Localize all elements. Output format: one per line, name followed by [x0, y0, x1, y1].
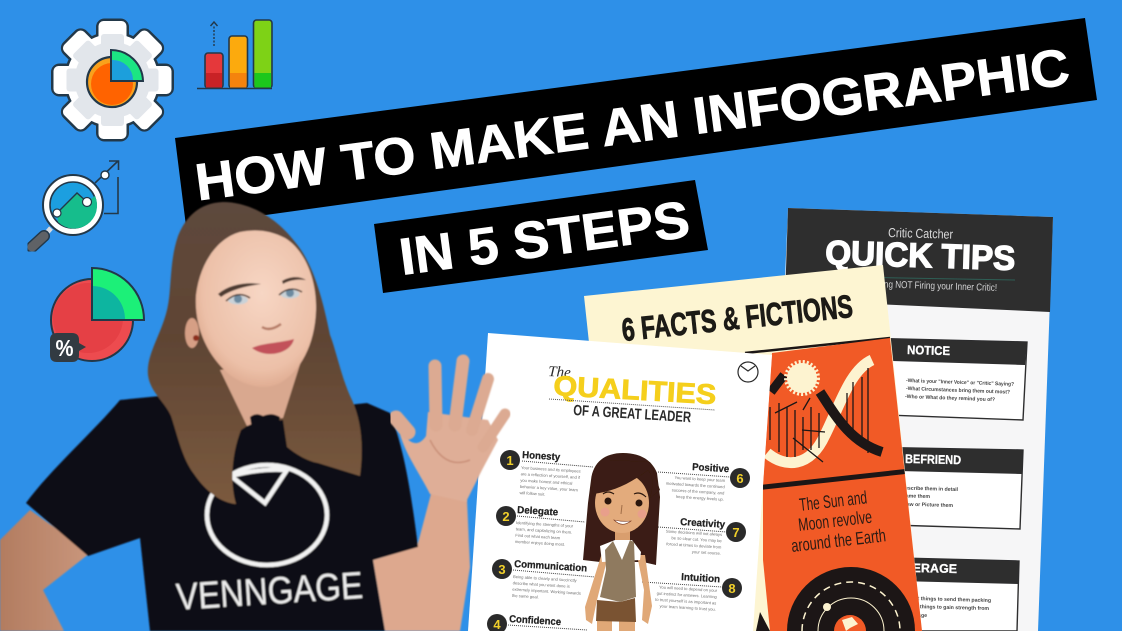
panel: quick tips poster [770, 208, 1053, 631]
section: notice [860, 338, 1027, 420]
quality headings: Honesty [522, 450, 561, 463]
poster title: QUALITIES [553, 370, 717, 410]
icon: percent pie chart [50, 268, 144, 362]
icon: magnifier over line chart [32, 161, 118, 247]
quality descriptions: you make honest and ethical [520, 478, 573, 486]
badge numbers: 7 [732, 525, 740, 540]
quality headings: Communication [514, 559, 587, 574]
fact text: The Sun and [798, 487, 868, 515]
quality descriptions: Some decisions will not always [666, 529, 722, 537]
quality headings: Creativity [680, 517, 726, 531]
icon: percent pie chart: % [56, 335, 74, 361]
quality descriptions: member enjoys doing most. [515, 539, 565, 547]
mouth [252, 339, 294, 354]
badge numbers: 3 [498, 562, 506, 577]
shirt logo [207, 465, 327, 565]
presenter face [185, 230, 316, 387]
eyes [228, 296, 248, 304]
quality headings [509, 450, 730, 628]
quality descriptions: to trust yourself is as important as [655, 597, 716, 606]
quality headings: Positive [692, 462, 730, 475]
quality descriptions [512, 465, 726, 612]
section: befriend [860, 447, 1023, 529]
section: befriend: -Describe them in detail [899, 485, 959, 493]
badge numbers: 6 [736, 471, 744, 486]
icon: venngage logo small [738, 362, 758, 382]
quality descriptions: keep the energy levels up. [676, 494, 724, 502]
poster title: The [548, 364, 571, 381]
section: leverage: -Leverage [902, 612, 927, 619]
fact text [790, 487, 887, 556]
sun and moon helix [767, 360, 882, 463]
quality descriptions: motivated towards the continued [666, 481, 726, 489]
poster title [549, 366, 716, 422]
quality descriptions: Find out what each team [515, 533, 561, 540]
quality descriptions: success of the company, and [672, 487, 725, 496]
title banner line 1: HOW TO MAKE AN INFOGRAPHIC [192, 38, 1073, 212]
quality descriptions: will follow suit. [519, 490, 546, 497]
quality descriptions: are a reflection of yourself, and if [521, 471, 581, 480]
quality descriptions: forced at times to deviate from [666, 541, 722, 550]
quality headings: Confidence [509, 614, 562, 628]
presenter hair [148, 202, 362, 504]
quality descriptions: Your business and its employees [521, 465, 581, 474]
poster header: Critic Catcher [888, 225, 954, 242]
quality headings: Delegate [517, 505, 559, 519]
poster title: OF A GREAT LEADER [573, 402, 692, 426]
badge numbers [493, 453, 744, 631]
quality descriptions: You will need to depend on your [659, 584, 718, 593]
section: befriend: BEFRIEND [905, 452, 961, 467]
presenter collar [250, 414, 280, 430]
panel: qualities of a great leader poster [468, 333, 772, 631]
quality descriptions: describe what you want done is [513, 580, 570, 589]
section: notice: -What Circumstances bring them out most? [906, 386, 1010, 396]
section: leverage [860, 557, 1019, 631]
presenter arms [0, 490, 470, 631]
title banner line 2: IN 5 STEPS [396, 191, 693, 287]
quality descriptions: your team learning to trust you. [659, 603, 716, 612]
section: notice: -Who or What do they remind you of? [905, 394, 995, 403]
nose [262, 324, 281, 329]
fact text: around the Earth [790, 525, 887, 556]
presenter black t-shirt [26, 395, 418, 631]
eyebrows [218, 283, 261, 297]
section: leverage: LEVERAGE [888, 561, 957, 576]
presenter raised hand [396, 361, 505, 502]
quality descriptions: be so clear cut. You may be [671, 535, 723, 543]
quality descriptions: the same goal. [512, 593, 539, 600]
quality descriptions: extremely important. Working towards [512, 587, 581, 596]
presenter neck [220, 358, 302, 426]
presenter black t-shirt: VENNGAGE [175, 565, 364, 619]
quality descriptions: gut instinct for answers. Learning [657, 591, 718, 599]
quality headings: Intuition [681, 572, 720, 585]
quality descriptions: behavior a key value, your team [520, 484, 579, 492]
quality descriptions: Identifying the strengths of your [516, 520, 574, 529]
number badges [487, 450, 750, 631]
section: befriend: -Name them [900, 493, 930, 500]
quality descriptions: Being able to clearly and succinctly [513, 574, 578, 583]
quality descriptions: your set course. [692, 549, 721, 556]
badge numbers: 2 [502, 509, 510, 524]
section: befriend: -Draw or Picture them [899, 502, 953, 509]
poster heading: 6 FACTS & FICTIONS [620, 288, 854, 348]
badge numbers: 1 [506, 453, 514, 468]
poster header [785, 208, 1053, 312]
section: leverage: -List things to send them packing [908, 596, 991, 604]
quality descriptions: You want to keep your team [674, 475, 726, 483]
orange illustration panel [755, 338, 922, 631]
badge numbers: 8 [728, 581, 736, 596]
dotted leader lines [508, 461, 730, 630]
planet orbit diagram [787, 567, 915, 631]
icon: gear with pie chart [54, 21, 172, 139]
cartoon leader character [583, 453, 660, 631]
section: leverage: -List things to gain strength from [907, 604, 989, 612]
panel: six facts and fictions poster [584, 265, 922, 631]
quality descriptions: team, and capitalizing on them. [516, 526, 572, 535]
poster header: QUICK TIPS [825, 234, 1016, 278]
section: notice: -What is your "Inner Voice" or "Critic" Saying? [906, 378, 1014, 388]
poster header: Encouraging NOT Firing your Inner Critic! [847, 278, 997, 294]
fact text: Moon revolve [797, 507, 873, 535]
presenter photo stand-in [0, 202, 470, 631]
section: notice: NOTICE [907, 343, 950, 358]
icon: rising bar chart [197, 20, 272, 88]
